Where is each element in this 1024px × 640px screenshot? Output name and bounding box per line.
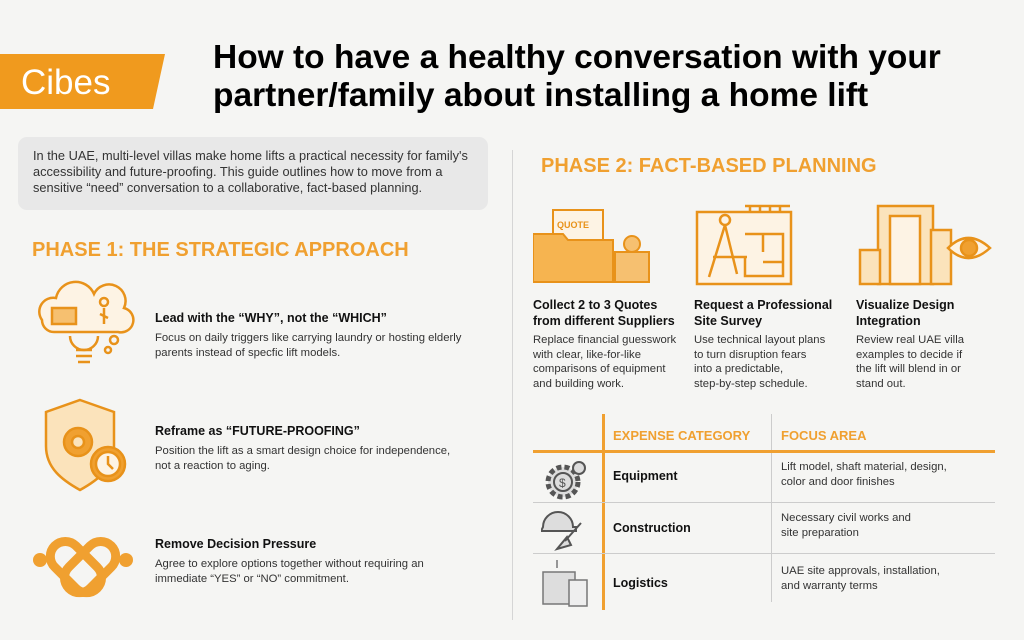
item 2 text: Position the lift as a smart design choice for independence, bbox=[155, 445, 450, 457]
phase 2 heading: PHASE 2: FACT-BASED PLANNING bbox=[541, 155, 877, 177]
icon: cloud lightbulb bbox=[38, 280, 135, 364]
logo banner bbox=[0, 54, 165, 109]
icon: blueprint bbox=[696, 204, 792, 286]
icon: knot bbox=[33, 537, 133, 598]
column 1 text bbox=[533, 298, 676, 390]
icon: villa eye bbox=[858, 204, 992, 286]
row: logistics: and warranty terms bbox=[781, 580, 878, 592]
column 2 text: Request a Professional bbox=[694, 298, 832, 312]
column 3 text: Visualize Design bbox=[856, 298, 954, 312]
row: construction: Necessary civil works and bbox=[781, 512, 911, 524]
intro box: In the UAE, multi-level villas make home lifts a practical necessity for family's accessibility and future-proofing. This guide outlines how to move from a sensitive “need” conversation to a collaborative, fact-based planning. bbox=[33, 148, 468, 195]
phase 1 heading: PHASE 1: THE STRATEGIC APPROACH bbox=[32, 239, 409, 261]
column 1 text: from different Suppliers bbox=[533, 314, 675, 328]
row: construction: site preparation bbox=[781, 526, 859, 538]
intro box bbox=[18, 137, 488, 210]
expense table bbox=[533, 414, 995, 610]
column 2 text: into a predictable, bbox=[694, 363, 783, 375]
title bbox=[213, 39, 941, 114]
item 3 text: Agree to explore options together without requiring an bbox=[155, 558, 424, 570]
column 1 text: with clear, like-for-like bbox=[533, 348, 641, 360]
column 1 text: and building work. bbox=[533, 378, 624, 390]
column 3 text bbox=[856, 298, 964, 390]
column 2 text: Use technical layout plans bbox=[694, 334, 825, 346]
row: equipment: Lift model, shaft material, design, bbox=[781, 461, 947, 473]
column 3 text: Integration bbox=[856, 314, 921, 328]
icon: shield gear clock bbox=[44, 398, 126, 492]
divider bbox=[512, 150, 513, 620]
row: construction bbox=[541, 511, 911, 551]
row: equipment: $ bbox=[559, 476, 566, 490]
item 1 text: Focus on daily triggers like carrying laundry or hosting elderly bbox=[155, 332, 461, 344]
column 1 text: Collect 2 to 3 Quotes bbox=[533, 298, 657, 312]
item 3 text bbox=[155, 537, 424, 584]
column 3 text: the lift will blend in or bbox=[856, 363, 961, 375]
title: partner/family about installing a home lift bbox=[213, 77, 868, 114]
row: construction: Construction bbox=[613, 521, 691, 535]
item 2 text bbox=[155, 424, 450, 472]
row: logistics bbox=[542, 560, 940, 607]
item 1 text bbox=[155, 311, 462, 358]
column 3 text: stand out. bbox=[856, 378, 906, 390]
row: equipment: color and door finishes bbox=[781, 476, 895, 488]
icon: quotes folder: QUOTE bbox=[557, 220, 589, 230]
column 2 text bbox=[694, 298, 832, 390]
column 2 text: to turn disruption fears bbox=[694, 348, 806, 360]
column 1 text: comparisons of equipment bbox=[533, 363, 666, 375]
column 3 text: Review real UAE villa bbox=[856, 334, 964, 346]
item 3 text: Remove Decision Pressure bbox=[155, 537, 316, 551]
row: equipment: Equipment bbox=[613, 469, 678, 483]
column 2 text: Site Survey bbox=[694, 314, 762, 328]
icon: quotes folder bbox=[533, 209, 650, 283]
item 3 text: immediate “YES” or “NO” commitment. bbox=[155, 572, 349, 584]
item 2 text: Reframe as “FUTURE-PROOFING” bbox=[155, 424, 360, 438]
table header: EXPENSE CATEGORY bbox=[613, 428, 750, 443]
row: equipment bbox=[546, 461, 947, 500]
item 1 text: Lead with the “WHY”, not the “WHICH” bbox=[155, 311, 387, 325]
expense table: FOCUS AREA bbox=[781, 428, 866, 443]
logo banner: Cibes bbox=[21, 63, 110, 102]
item 1 text: parents instead of specfic lift models. bbox=[155, 346, 340, 358]
column 3 text: examples to decide if bbox=[856, 348, 962, 360]
row: logistics: Logistics bbox=[613, 576, 668, 590]
title: How to have a healthy conversation with your bbox=[213, 39, 941, 76]
column 2 text: step-by-step schedule. bbox=[694, 378, 808, 390]
row: logistics: UAE site approvals, installation, bbox=[781, 565, 940, 577]
item 2 text: not a reaction to aging. bbox=[155, 460, 270, 472]
column 1 text: Replace financial guesswork bbox=[533, 334, 676, 346]
